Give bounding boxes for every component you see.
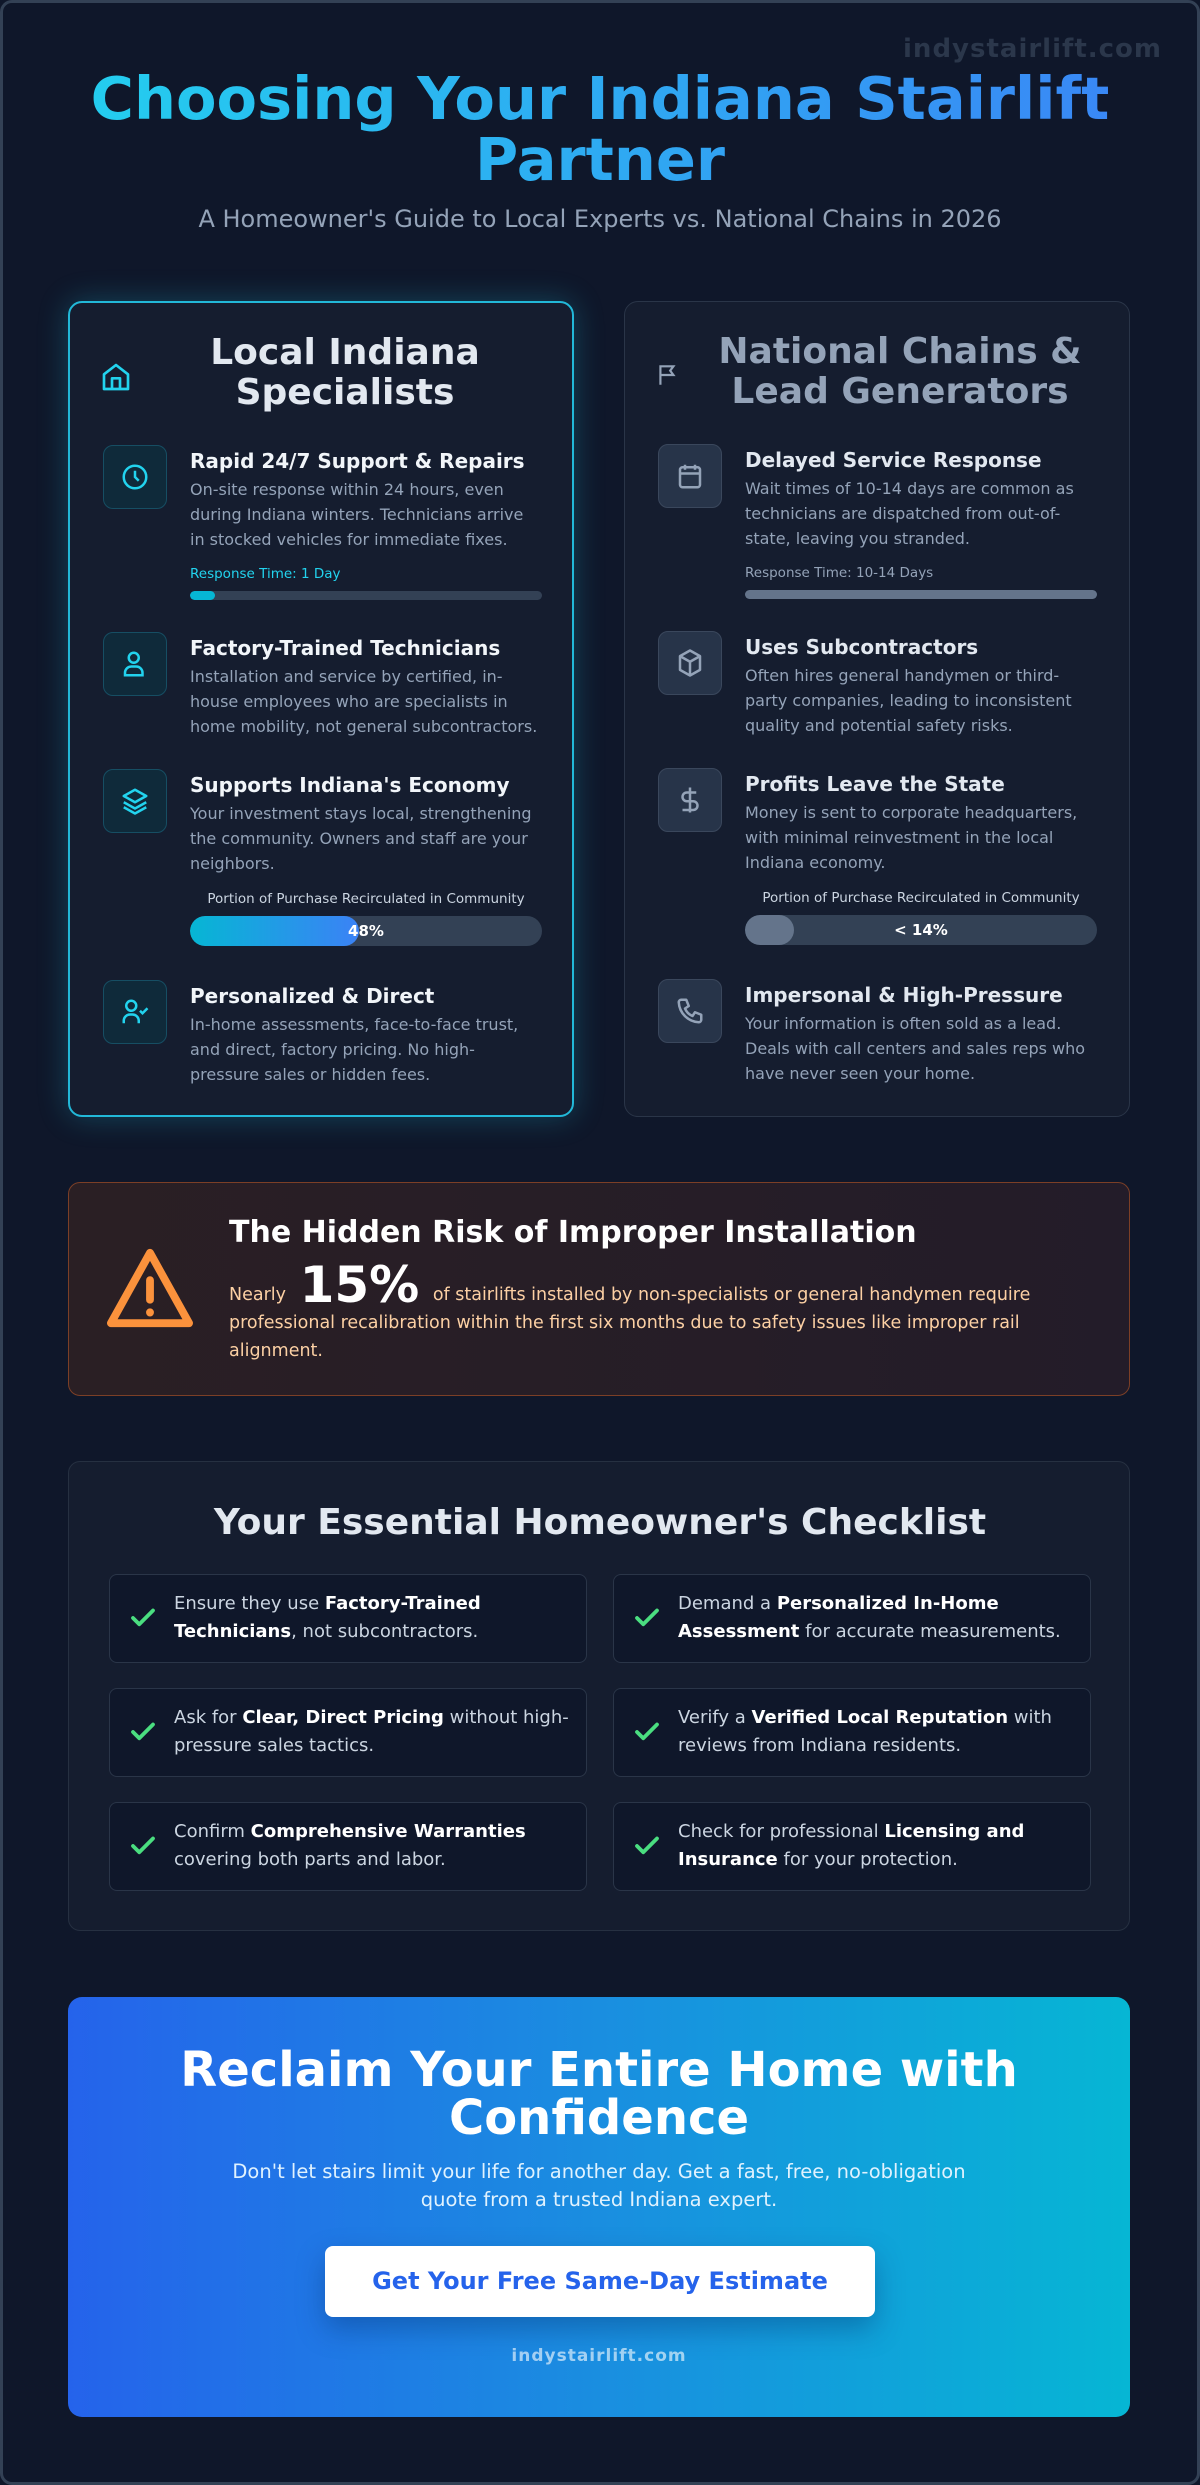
icon: user check <box>103 980 167 1044</box>
item: profits: Money is sent to corporate headquarters, with minimal reinvestment in the local Indiana economy. <box>745 803 1077 872</box>
heading: checklist: Your Essential Homeowner's Checklist <box>214 1502 986 1543</box>
panel: call to action <box>68 1997 1130 2417</box>
item: personalized: In-home assessments, face-to-face trust, and direct, factory pricing. No high-pressure sales or hidden fees. <box>190 1015 518 1084</box>
check item 4: Verify a Verified Local Reputation with reviews from Indiana residents. <box>678 1707 1052 1756</box>
bar: 48%: 48% <box>348 922 384 940</box>
icon: clock <box>103 445 167 509</box>
check item 5 <box>109 1802 587 1891</box>
heading: national <box>718 331 1082 412</box>
watermark: indystairlift.com <box>903 34 1162 64</box>
item: economy <box>103 769 542 946</box>
button: Get Your Free Same-Day Estimate <box>372 2267 828 2295</box>
item: delayed: Delayed Service Response <box>745 448 1042 472</box>
item: rapid support: On-site response within 24 hours, even during Indiana winters. Technicians arrive in stocked vehicles for immediate fixes. <box>190 480 523 549</box>
item: factory trained: Factory-Trained Technicians <box>190 636 500 660</box>
item: impersonal: Your information is often sold as a lead. Deals with call centers and sales reps who have never seen your home. <box>745 1014 1085 1083</box>
panel: national chains <box>624 301 1130 1117</box>
heading: local: Local Indiana <box>210 332 480 373</box>
icon: warning <box>107 1248 193 1328</box>
heading: local: Specialists <box>236 372 454 413</box>
check item 5: Confirm Comprehensive Warranties covering both parts and labor. <box>174 1821 526 1870</box>
item: impersonal <box>658 979 1085 1083</box>
bar: <14%: < 14% <box>894 921 948 939</box>
heading: local <box>210 332 480 413</box>
icon: home <box>102 364 130 390</box>
icon: flag <box>659 365 676 385</box>
check item 2: Demand a Personalized In-Home Assessment for accurate measurements. <box>678 1593 1061 1642</box>
item: profits <box>658 768 1097 945</box>
item: impersonal: Impersonal & High-Pressure <box>745 983 1063 1007</box>
icon: phone <box>658 979 722 1043</box>
title <box>0 68 1200 190</box>
bar: <14% <box>745 915 1097 945</box>
check item 3: Ask for Clear, Direct Pricing without high-pressure sales tactics. <box>174 1707 569 1756</box>
subtitle: A Homeowner's Guide to Local Experts vs. National Chains in 2026 <box>198 205 1002 233</box>
footer url: indystairlift.com <box>511 2346 687 2366</box>
icon: layers <box>103 769 167 833</box>
heading: cta: Confidence <box>449 2090 749 2146</box>
item: delayed: Response Time: 10-14 Days <box>745 565 933 581</box>
item: economy: Supports Indiana's Economy <box>190 773 510 797</box>
icon: calendar <box>658 444 722 508</box>
item: economy: Portion of Purchase Recirculated in Community <box>207 891 525 907</box>
item: factory trained: Installation and service by certified, in-house employees who are specialists in home mobility, not general subcontractors. <box>190 667 537 736</box>
title: Choosing Your Indiana Stairlift <box>91 64 1109 133</box>
text: risk stat: Nearly 15% of stairlifts installed by non-specialists or general handymen require professional recalibration within the first six months due to safety issues like improper rail alignment. <box>229 1256 1030 1361</box>
check item 4 <box>613 1688 1091 1777</box>
title: Partner <box>475 125 725 194</box>
item: delayed <box>658 444 1097 599</box>
check item 2 <box>613 1574 1091 1663</box>
item: profits: Portion of Purchase Recirculated in Community <box>762 890 1080 906</box>
check item 3 <box>109 1688 587 1777</box>
button <box>325 2246 875 2317</box>
check item 6: Check for professional Licensing and Insurance for your protection. <box>678 1821 1024 1870</box>
bar: response time national <box>745 590 1097 599</box>
heading: national: National Chains & <box>718 331 1082 372</box>
check item 1 <box>109 1574 587 1663</box>
text: cta sub: Don't let stairs limit your life for another day. Get a fast, free, no-obligation quote from a trusted Indiana expert. <box>232 2160 966 2211</box>
check item 1: Ensure they use Factory-Trained Technicians, not subcontractors. <box>174 1593 481 1642</box>
item: subcontractors <box>658 631 1072 735</box>
panel: hidden risk <box>68 1182 1130 1396</box>
item: factory trained <box>103 632 537 736</box>
item: rapid support <box>103 445 542 600</box>
check item 6 <box>613 1802 1091 1891</box>
item: delayed: Wait times of 10-14 days are common as technicians are dispatched from out-of-state, leaving you stranded. <box>745 479 1074 548</box>
heading: risk: The Hidden Risk of Improper Installation <box>229 1215 917 1250</box>
item: subcontractors: Uses Subcontractors <box>745 635 978 659</box>
icon: dollar <box>658 768 722 832</box>
item: subcontractors: Often hires general handymen or third-party companies, leading to inconsistent quality and potential safety risks. <box>745 666 1072 735</box>
icon: box <box>658 631 722 695</box>
bar: response time <box>190 591 542 600</box>
icon: user <box>103 632 167 696</box>
item: personalized <box>103 980 518 1084</box>
item: personalized: Personalized & Direct <box>190 984 434 1008</box>
bar: 48% <box>190 916 542 946</box>
heading: cta <box>180 2042 1018 2146</box>
item: rapid support: Response Time: 1 Day <box>190 566 341 582</box>
panel: checklist <box>68 1461 1130 1931</box>
heading: cta: Reclaim Your Entire Home with <box>180 2042 1018 2098</box>
panel: local specialists <box>68 301 574 1117</box>
item: rapid support: Rapid 24/7 Support & Repairs <box>190 449 525 473</box>
item: profits: Profits Leave the State <box>745 772 1005 796</box>
heading: national: Lead Generators <box>731 371 1069 412</box>
item: economy: Your investment stays local, strengthening the community. Owners and staff are your neighbors. <box>190 804 532 873</box>
